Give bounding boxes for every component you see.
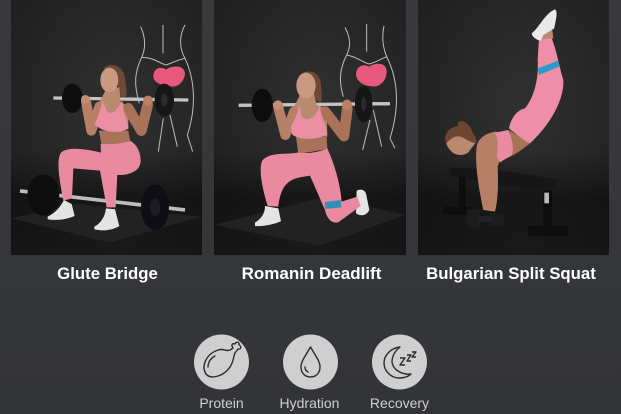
heading: Glute Bridge: Glute Bridge	[57, 264, 158, 283]
white sneakers	[255, 190, 369, 226]
resistance band	[325, 200, 341, 209]
lower barbell	[20, 174, 185, 230]
icon: hydration droplet	[283, 334, 338, 390]
exercise mat	[214, 197, 405, 246]
athlete	[58, 65, 153, 207]
heading: Bulgarian Split Squat: Bulgarian Split Squat	[426, 264, 596, 283]
heading: Romanin Deadlift: Romanin Deadlift	[242, 264, 382, 283]
panel: Glute Bridge photo	[11, 0, 202, 255]
anatomy outline with highlighted glutes	[136, 25, 193, 152]
anatomy outline with highlighted glutes	[340, 24, 397, 150]
upper barbell	[53, 84, 188, 116]
exercise mat	[12, 204, 202, 243]
barbell	[239, 86, 390, 122]
panel: Bulgarian Split Squat photo	[418, 0, 609, 255]
panel: Romanin Deadlift photo	[214, 0, 406, 255]
athlete	[445, 9, 563, 212]
resistance band	[538, 61, 559, 75]
label: Recovery: Recovery	[370, 395, 429, 411]
white sneakers	[48, 200, 119, 230]
weight bench	[443, 167, 568, 236]
white sneaker	[532, 9, 557, 41]
athlete	[261, 71, 361, 223]
label: Protein: Protein	[199, 395, 244, 411]
icon: protein drumstick	[194, 334, 249, 390]
icon: recovery moon	[372, 334, 427, 390]
label: Hydration: Hydration	[280, 395, 339, 411]
